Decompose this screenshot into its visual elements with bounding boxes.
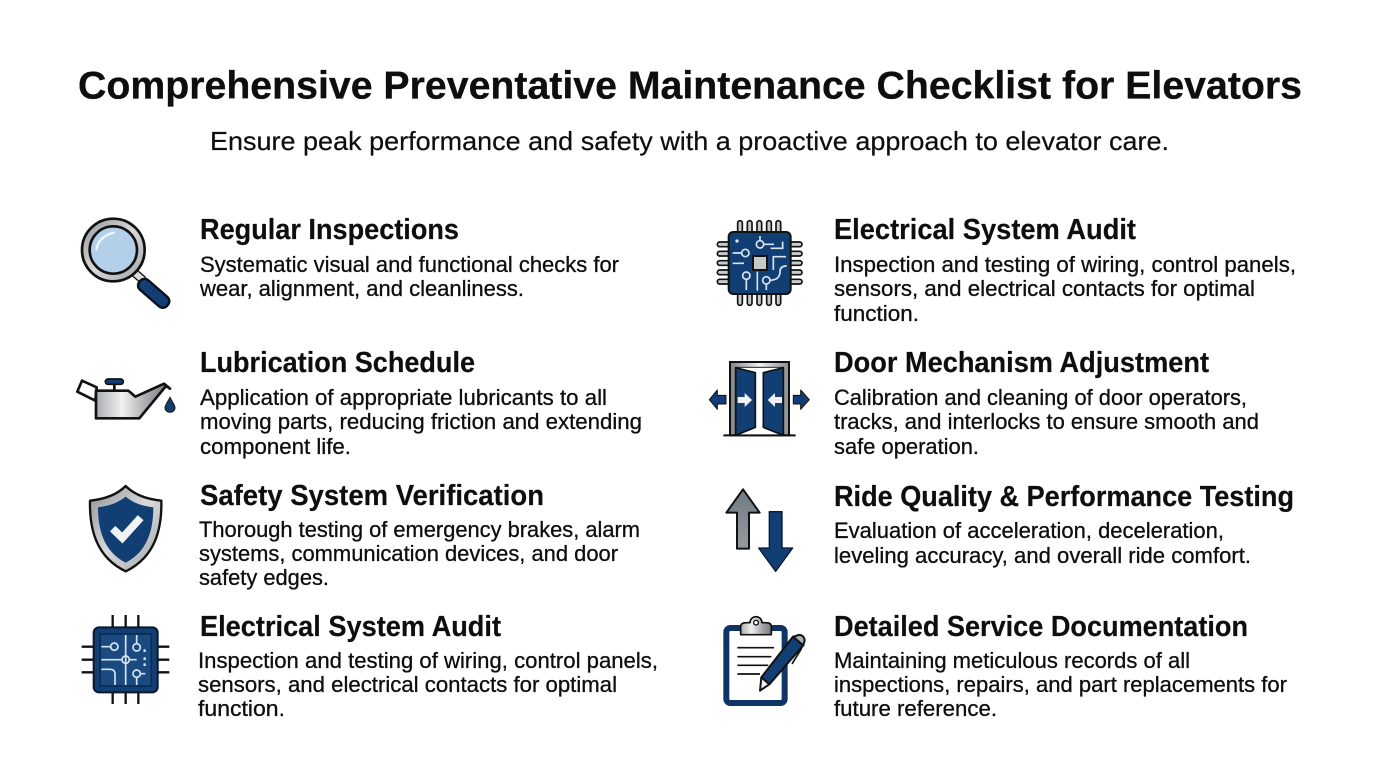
description: component life. (200, 434, 351, 459)
description: wear, alignment, and cleanliness. (199, 276, 524, 301)
heading: Lubrication Schedule (200, 347, 475, 379)
description: Maintaining meticulous records of all (834, 648, 1190, 673)
item: Regular Inspections (82, 214, 619, 310)
description: safety edges. (199, 565, 329, 590)
description: Thorough testing of emergency brakes, alarm (199, 517, 640, 542)
heading: Detailed Service Documentation (834, 611, 1248, 643)
description: moving parts, reducing friction and extending (200, 409, 642, 434)
heading: Safety System Verification (200, 480, 544, 512)
item: Electrical System Audit (right) (717, 214, 1296, 326)
item: Door Mechanism Adjustment (709, 347, 1259, 459)
item: Safety System Verification (90, 480, 640, 590)
description: future reference. (834, 696, 997, 721)
heading: Regular Inspections (200, 214, 459, 246)
icon: circuit chip (82, 615, 169, 704)
description (834, 648, 1287, 721)
description: Evaluation of acceleration, deceleration, (834, 518, 1224, 543)
description: inspections, repairs, and part replacements for (834, 672, 1287, 697)
title: Comprehensive Preventative Maintenance Checklist for Elevators (78, 64, 1302, 108)
description (199, 517, 640, 590)
description: safe operation. (834, 434, 979, 459)
icon: microchip (717, 221, 802, 305)
heading: Electrical System Audit (834, 214, 1136, 246)
icon: up and down arrows (726, 489, 793, 571)
icon: shield with check (90, 486, 161, 571)
description (834, 385, 1259, 459)
icon: oil can (77, 379, 175, 418)
description: function. (834, 301, 919, 326)
item: Ride Quality & Performance Testing (726, 481, 1294, 571)
heading: Electrical System Audit (200, 611, 501, 643)
icon: elevator doors (709, 362, 809, 435)
description: Inspection and testing of wiring, control panels, (198, 648, 658, 673)
item: Lubrication Schedule (77, 347, 642, 459)
description (199, 252, 619, 301)
description: function. (198, 696, 285, 721)
description (834, 252, 1296, 326)
description (198, 648, 658, 721)
item: Detailed Service Documentation (726, 611, 1287, 721)
description: Systematic visual and functional checks for (200, 252, 619, 277)
item: Electrical System Audit (left) (82, 611, 658, 721)
icon: magnifying glass (82, 219, 172, 310)
heading: Ride Quality & Performance Testing (834, 481, 1294, 513)
description: leveling accuracy, and overall ride comfort. (834, 543, 1251, 568)
description: Application of appropriate lubricants to all (200, 385, 607, 410)
description: tracks, and interlocks to ensure smooth and (834, 409, 1259, 434)
icon: clipboard and pen (726, 617, 805, 703)
subtitle: Ensure peak performance and safety with a proactive approach to elevator care. (210, 126, 1169, 156)
heading: Door Mechanism Adjustment (834, 347, 1209, 379)
description: Inspection and testing of wiring, control panels, (834, 252, 1296, 277)
description (200, 385, 642, 459)
description: systems, communication devices, and door (199, 541, 618, 566)
description: sensors, and electrical contacts for optimal (834, 276, 1255, 301)
description: sensors, and electrical contacts for optimal (198, 672, 617, 697)
description (834, 518, 1251, 568)
description: Calibration and cleaning of door operators, (834, 385, 1247, 410)
